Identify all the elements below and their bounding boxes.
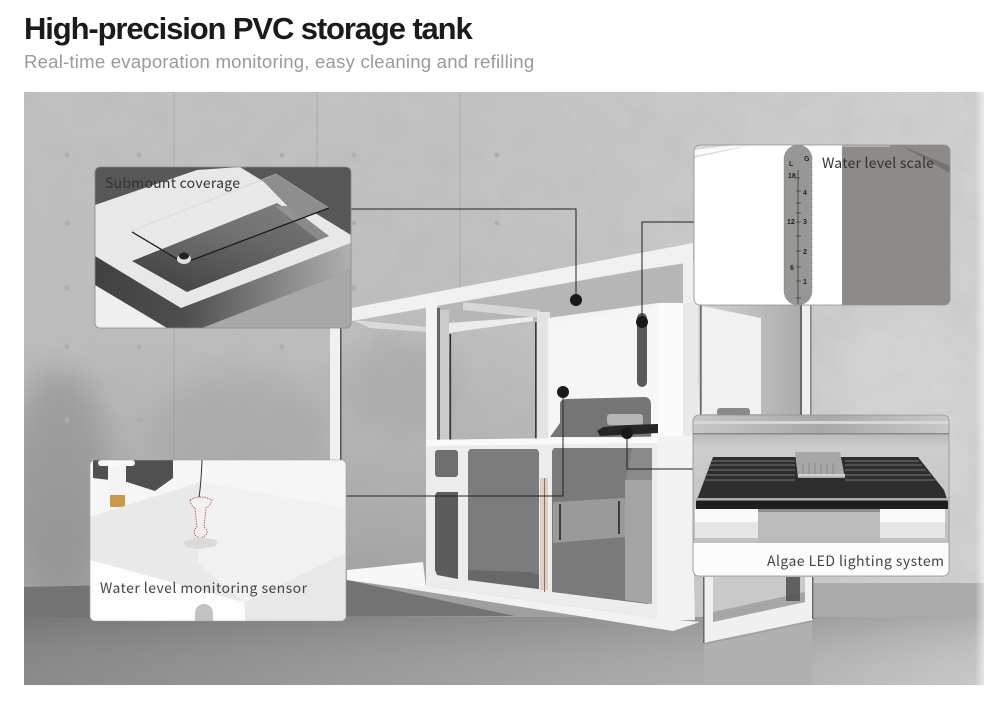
scale numbers: 6: [790, 265, 794, 272]
white frame structure: [330, 243, 812, 468]
main scene illustration: [24, 92, 984, 685]
label: Water level scale: [822, 153, 934, 173]
scale numbers: 12: [787, 219, 795, 226]
long top beam: [352, 243, 693, 321]
title: High-precision PVC storage tank: [24, 11, 472, 46]
scale numbers: 1: [803, 279, 807, 286]
label: Algae LED lighting system: [767, 551, 944, 571]
sump cutout: [550, 397, 651, 437]
rear dark grain band: [24, 580, 515, 618]
panel: algae LED lighting system: [693, 415, 949, 576]
measuring strip: [540, 478, 548, 590]
lower cabinet: [403, 436, 700, 631]
sight tube: [637, 313, 647, 387]
scale numbers: 18: [788, 173, 796, 180]
shaded ceiling under beam: [440, 263, 683, 330]
scale numbers: 2: [803, 249, 807, 256]
scale numbers: G: [804, 156, 810, 163]
scale numbers: [787, 156, 810, 286]
panel: water level scale: [694, 145, 950, 305]
label: Submount coverage: [105, 173, 240, 193]
columns: [330, 328, 340, 468]
scale numbers: L: [789, 161, 794, 168]
upper tank: [548, 303, 700, 440]
panel: water level monitoring sensor: [90, 460, 346, 621]
right stand: [703, 577, 814, 685]
LED fixture: [597, 424, 658, 436]
panel: submount coverage: [95, 167, 351, 328]
scale numbers: 3: [803, 219, 807, 226]
braces: [353, 320, 427, 332]
connector lines and markers: [346, 209, 694, 496]
label: Water level monitoring sensor: [100, 578, 308, 598]
cabinet windows: [435, 450, 458, 477]
left base plate: [347, 562, 426, 588]
baffle plate: [553, 498, 625, 543]
rear side: [695, 305, 812, 417]
scale numbers: 4: [803, 190, 807, 197]
marker dots: [557, 294, 648, 439]
floor: [24, 617, 984, 685]
subtitle: Real-time evaporation monitoring, easy cleaning and refilling: [24, 51, 534, 72]
